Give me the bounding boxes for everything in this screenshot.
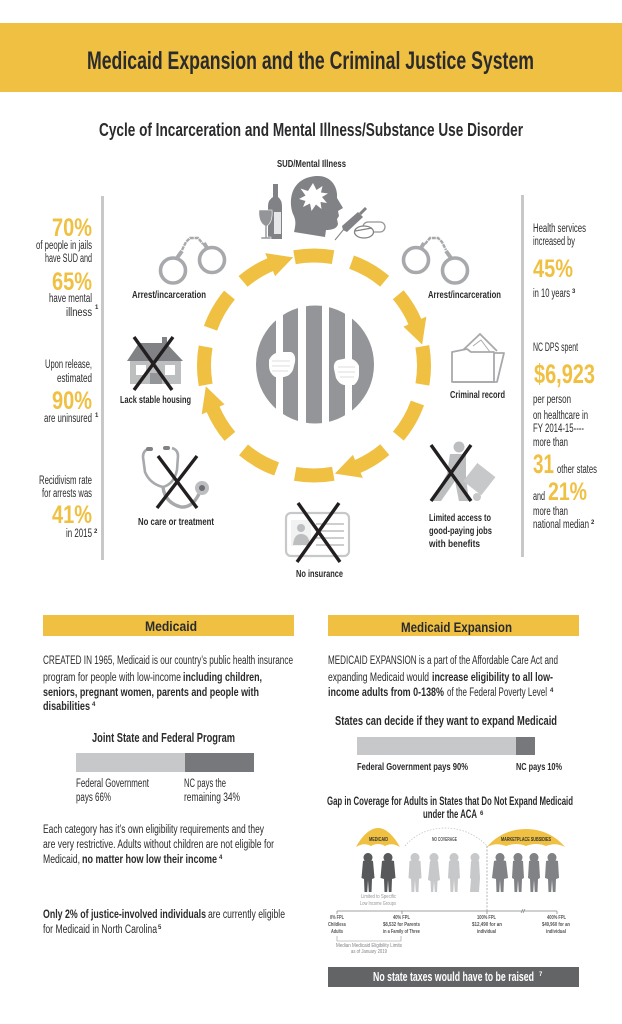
text block: Medicaid intro: CREATED IN 1965, Medicaid is our country’s public health insurance <box>43 655 293 667</box>
node: lack stable housing <box>120 337 191 406</box>
panel: right statistics: per person <box>533 394 571 406</box>
panel: right statistics: national median <box>533 519 589 531</box>
chart: joint program split: Joint State and Federal Program <box>92 730 235 745</box>
node: SUD / mental illness: SUD/Mental Illness <box>277 158 346 170</box>
chart: joint program split: Federal Government <box>76 778 150 790</box>
panel: left statistics: Recidivism rate <box>39 475 92 487</box>
panel: left statistics: 41% <box>52 501 92 529</box>
text block: expansion intro <box>328 655 558 699</box>
panel: right statistics: on healthcare in <box>533 410 588 422</box>
node: SUD / mental illness <box>259 158 385 240</box>
node: arrest left: Arrest/incarceration <box>132 289 206 301</box>
text block: expansion intro: income adults from 0-138% <box>328 687 444 699</box>
panel: right statistics: NC DPS spent <box>533 342 578 354</box>
panel: right statistics: increased by <box>533 236 575 248</box>
panel: left statistics: for arrests was <box>42 488 92 500</box>
node: lack stable housing: Lack stable housing <box>120 394 191 406</box>
title banner <box>0 23 622 92</box>
panel: left statistics: illness <box>66 307 92 319</box>
panel: right statistics: Health services <box>533 223 586 235</box>
chart: coverage gap: $8,532 for Parents <box>383 922 420 928</box>
panel: right statistics: and <box>533 491 545 503</box>
panel: right statistics <box>521 195 597 557</box>
panel: right statistics: 3 <box>572 289 576 295</box>
heading: Medicaid <box>43 615 294 636</box>
text block: expansion intro: increase eligibility to all low- <box>432 672 553 684</box>
chart: coverage gap: 40% FPL <box>393 915 410 921</box>
chart: coverage gap: Adults <box>331 929 343 935</box>
chart: coverage gap: $49,960 for an <box>542 922 570 928</box>
node: criminal record: Criminal record <box>450 389 505 401</box>
text block: Medicaid intro: disabilities <box>43 701 90 713</box>
panel: left statistics: have SUD and <box>45 253 92 265</box>
panel: left statistics: 1 <box>95 305 99 311</box>
chart: coverage gap: 400% FPL <box>547 915 566 921</box>
chart: coverage gap: $12,490 for an <box>472 922 503 928</box>
panel: left statistics: Upon release, <box>45 359 92 371</box>
chart: coverage gap: MARKETPLACE SUBSIDIES <box>501 837 551 843</box>
text block: 2 percent eligible: are currently eligible <box>208 909 285 921</box>
callout: no state taxes: 7 <box>539 972 543 978</box>
panel: right statistics: $6,923 <box>534 359 595 389</box>
node: no insurance <box>286 503 349 580</box>
chart: joint program split <box>76 730 254 804</box>
panel: Medicaid Expansion <box>327 615 579 987</box>
panel: left statistics: 1 <box>95 413 99 419</box>
node: arrest right <box>404 238 501 301</box>
callout: no state taxes: No state taxes would have to be raised <box>373 969 534 984</box>
text block: eligibility: Each category has it’s own eligibility requirements and they <box>43 824 264 836</box>
panel: right statistics: more than <box>533 506 568 518</box>
node: arrest left <box>132 238 224 301</box>
chart: coverage gap: 0% FPL <box>330 915 344 921</box>
node: limited jobs: Limited access to <box>429 512 491 524</box>
chart: coverage gap <box>327 796 573 955</box>
text block: Medicaid intro: including children, <box>183 672 262 684</box>
cycle ring with arrows <box>187 238 441 493</box>
panel: Medicaid <box>43 615 294 936</box>
text block: Medicaid intro: program for people with low-income <box>43 672 181 684</box>
panel: left statistics: 90% <box>52 387 92 415</box>
text block: Medicaid intro <box>43 655 293 713</box>
text block: 2 percent eligible: for Medicaid in North Carolina <box>43 924 157 936</box>
text block: eligibility: Medicaid, <box>43 854 80 866</box>
text block: 2 percent eligible <box>43 909 285 936</box>
text block: 2 percent eligible: 5 <box>158 925 162 931</box>
text block: eligibility <box>43 824 274 866</box>
panel: left statistics: in 2015 <box>66 528 92 540</box>
icon: prison bars with hands <box>256 300 374 430</box>
text block: 2 percent eligible: Only 2% of justice-involved individuals <box>43 909 206 921</box>
panel: left statistics <box>36 196 104 560</box>
panel: right statistics: 45% <box>533 255 573 283</box>
node: no care or treatment <box>138 446 214 528</box>
panel: right statistics: 21% <box>548 478 587 506</box>
panel: left statistics: have mental <box>49 293 92 305</box>
panel: right statistics: 2 <box>591 520 595 526</box>
chart: coverage gap: 6 <box>480 811 484 817</box>
chart: expansion funding split: NC pays 10% <box>516 761 562 773</box>
chart: coverage gap: individual <box>546 929 566 935</box>
chart: coverage gap: Limited to Specific <box>361 894 396 900</box>
panel: right statistics: in 10 years <box>533 288 570 300</box>
panel: right statistics: other states <box>557 464 597 476</box>
text block: Medicaid intro: seniors, pregnant women, parents and people with <box>43 687 259 699</box>
text block: expansion intro: 4 <box>550 688 554 694</box>
panel: left statistics: 65% <box>52 268 92 296</box>
heading: Medicaid Expansion: Medicaid Expansion <box>401 619 512 635</box>
panel: right statistics: more than <box>533 437 568 449</box>
chart: coverage gap: 100% FPL <box>477 915 496 921</box>
panel: left statistics: estimated <box>57 373 92 385</box>
text block: eligibility: are very restrictive. Adults without children are not eligible for <box>43 839 274 851</box>
panel: left statistics: are uninsured <box>44 413 92 425</box>
node: limited jobs: with benefits <box>428 538 480 550</box>
chart: coverage gap: NO COVERAGE <box>432 837 457 843</box>
node: no insurance: No insurance <box>296 568 343 580</box>
chart: joint program split: remaining 34% <box>184 792 240 804</box>
panel: right statistics: FY 2014-15---- <box>533 423 584 435</box>
chart: coverage gap: Median Medicaid Eligibility Limits <box>336 943 402 949</box>
chart: joint program split: NC pays the <box>184 778 226 790</box>
text block: eligibility: no matter how low their income <box>82 854 217 866</box>
chart: coverage gap: as of January 2019 <box>351 949 387 955</box>
chart: expansion funding split: Federal Government pays 90% <box>357 761 468 773</box>
node: no care or treatment: No care or treatment <box>138 516 214 528</box>
chart: coverage gap: Low Income Groups <box>360 901 396 907</box>
node: criminal record <box>450 334 505 401</box>
chart: coverage gap: under the ACA <box>423 809 477 821</box>
node: limited jobs: good-paying jobs <box>429 525 492 537</box>
chart: coverage gap: individual <box>477 929 496 935</box>
text block: Medicaid intro: 4 <box>92 702 96 708</box>
chart: expansion funding split <box>335 714 562 773</box>
panel: left statistics: of people in jails <box>36 240 92 252</box>
chart: joint program split: pays 66% <box>76 792 111 804</box>
chart: coverage gap: MEDICAID <box>369 837 388 843</box>
node: arrest right: Arrest/incarceration <box>428 289 501 301</box>
panel: left statistics: 70% <box>52 214 92 242</box>
text block: expansion intro: expanding Medicaid would <box>328 672 429 684</box>
panel: right statistics: 31 <box>533 449 554 479</box>
heading: Medicaid Expansion <box>328 615 579 636</box>
chart: coverage gap: in a Family of Three <box>383 929 420 935</box>
panel: left statistics: 2 <box>94 529 98 535</box>
chart: coverage gap: Childless <box>328 922 346 928</box>
node: limited jobs <box>428 442 495 550</box>
text block: expansion intro: of the Federal Poverty Level <box>447 687 547 699</box>
text block: eligibility: 4 <box>219 855 223 861</box>
callout: no state taxes <box>328 967 579 987</box>
heading: Medicaid: Medicaid <box>145 618 197 634</box>
